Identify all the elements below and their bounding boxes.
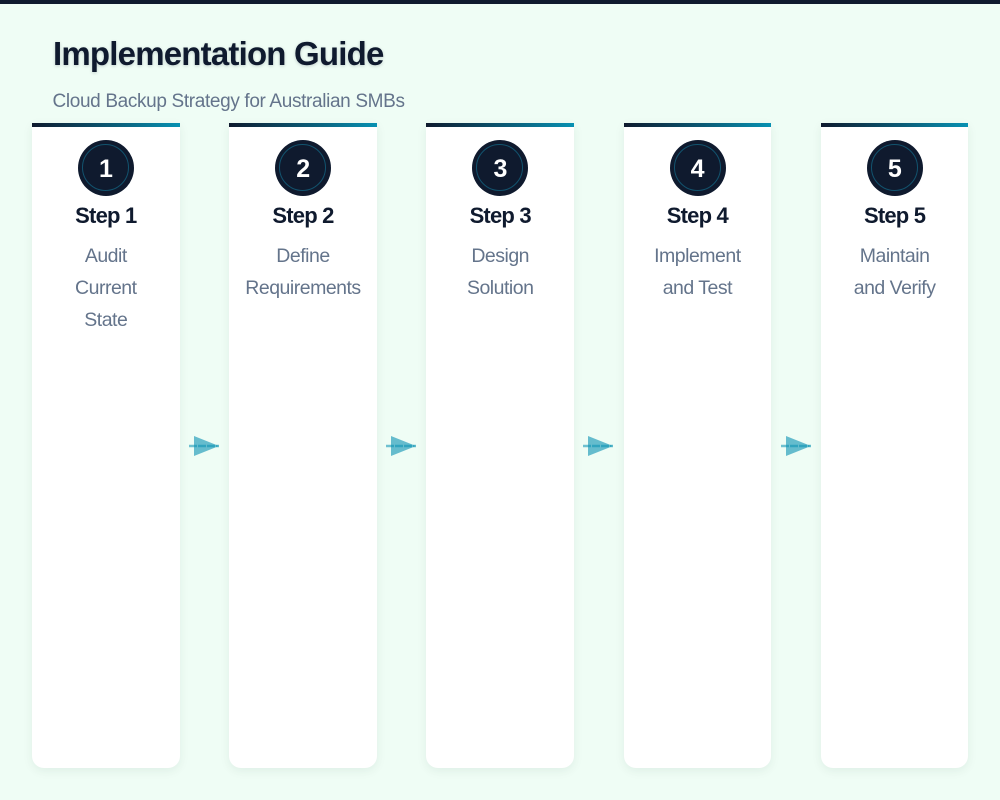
panel: step 3: [426, 123, 574, 768]
arrow: step 1 to step 2: [189, 436, 219, 456]
step 2 description: [245, 245, 361, 299]
step 3 number badge: 3: [493, 155, 507, 183]
step 4 number badge: 4: [691, 155, 705, 183]
step 3 number badge: [472, 140, 528, 196]
panel: step 2: [229, 123, 377, 768]
step 1 description: [75, 245, 137, 331]
step 5 heading: Step 5: [864, 203, 925, 228]
step 3 description: Design: [471, 245, 529, 267]
step 5 description: and Verify: [854, 277, 935, 299]
panel: step 4: [624, 123, 771, 768]
step 4 description: [654, 245, 741, 299]
step 4 number badge: [670, 140, 726, 196]
step 3 description: Solution: [467, 277, 533, 299]
title: Implementation Guide: [53, 35, 384, 72]
arrow: step 2 to step 3: [386, 436, 416, 456]
arrow: step 3 to step 4: [583, 436, 613, 456]
step 1 description: Audit: [85, 245, 127, 267]
step 5 number badge: [867, 140, 923, 196]
step 3 description: [467, 245, 533, 299]
step 1 heading: Step 1: [75, 203, 136, 228]
step 5 description: [854, 245, 936, 299]
step 1 description: Current: [75, 277, 137, 299]
step 4 heading: Step 4: [667, 203, 728, 228]
step 1 description: State: [84, 309, 127, 331]
arrow: step 4 to step 5: [781, 436, 811, 456]
step 3 heading: Step 3: [470, 203, 531, 228]
panel: step 1: [32, 123, 180, 768]
step 2 number badge: [275, 140, 331, 196]
panel: step 5: [821, 123, 968, 768]
subtitle: Cloud Backup Strategy for Australian SMBs: [52, 91, 405, 112]
step 1 number badge: [78, 140, 134, 196]
top accent bar: [0, 0, 1000, 4]
step 1 number badge: 1: [99, 155, 113, 183]
step 2 number badge: 2: [296, 155, 310, 183]
step 2 description: Requirements: [245, 277, 361, 299]
step 2 description: Define: [276, 245, 330, 267]
step 5 description: Maintain: [860, 245, 929, 267]
step 2 heading: Step 2: [272, 203, 334, 228]
step 5 number badge: 5: [888, 155, 902, 183]
step 4 description: Implement: [654, 245, 741, 267]
step 4 description: and Test: [663, 277, 732, 299]
